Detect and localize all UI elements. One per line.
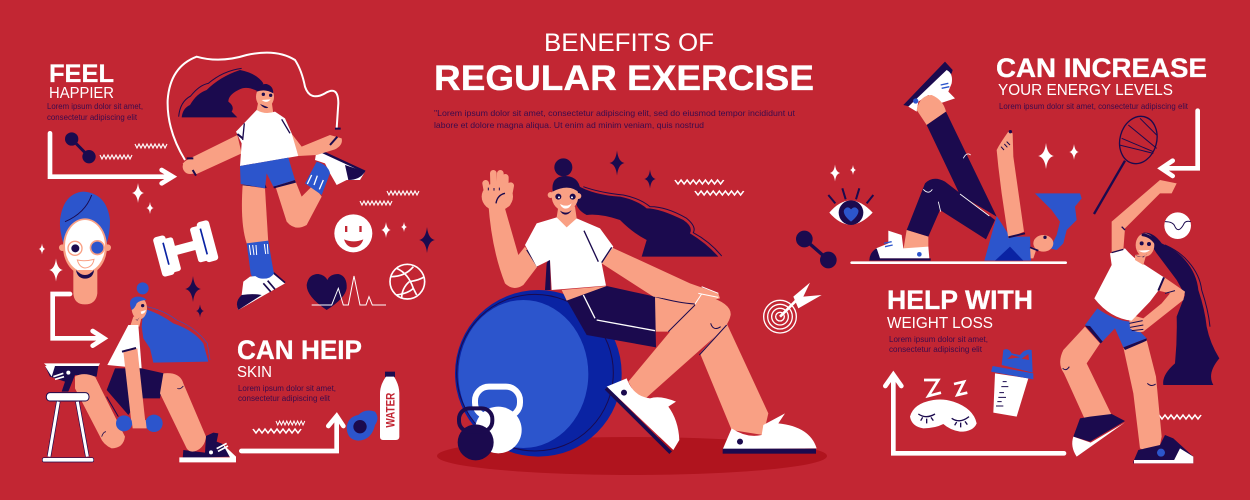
central woman on fitness ball	[455, 158, 837, 460]
right arm	[602, 247, 720, 303]
heading: can help skin: SKIN	[237, 364, 272, 381]
heading: feel happier: FEEL	[49, 60, 114, 88]
heading: can help skin	[237, 335, 362, 403]
sparkles	[39, 143, 1079, 318]
intro text: "Lorem ipsum dolor sit amet, consectetur adipiscing elit, sed do eiusmod tempor incididunt ut	[434, 108, 796, 118]
heading: can help skin: CAN HEIP	[237, 335, 362, 365]
heading: can increase energy	[996, 53, 1207, 111]
face mask woman	[59, 192, 111, 283]
icon: small navy dumbbell	[65, 132, 96, 163]
waist	[562, 286, 607, 301]
arrow: to jump rope girl	[50, 133, 173, 183]
zigzags	[100, 144, 1201, 433]
leg detail lines	[655, 297, 727, 355]
heading: feel happier: HAPPIER	[49, 85, 114, 102]
right top group	[828, 62, 1198, 263]
left bottom group	[42, 257, 425, 462]
heading: can increase energy: Lorem ipsum dolor sit amet, consectetur adipiscing elit	[999, 101, 1189, 111]
arrow: to water	[241, 416, 343, 451]
icon: sleep mask	[910, 380, 977, 432]
icon: smiley	[334, 214, 372, 252]
heading: help with weight loss: WEIGHT LOSS	[887, 315, 993, 332]
intro text	[434, 108, 796, 130]
heading: help with weight loss: Lorem ipsum dolor sit amet,	[889, 334, 988, 344]
icon: racket	[1094, 112, 1162, 214]
stretching woman	[1060, 180, 1219, 463]
jump rope girl	[179, 68, 365, 281]
icon: navy dumbbell	[796, 231, 837, 268]
heading: help with weight loss: consectetur adipiscing elit	[889, 344, 983, 354]
front leg and thigh	[628, 296, 731, 403]
heading: can increase energy: YOUR ENERGY LEVELS	[998, 82, 1173, 99]
icon: tennis ball	[1164, 212, 1191, 239]
head	[548, 158, 581, 227]
ponytail	[575, 185, 722, 257]
heading: can help skin: consectetur adipiscing elit	[238, 393, 331, 403]
back leg	[700, 323, 768, 435]
icon: heart with ECG	[307, 274, 386, 310]
heading: can increase energy: CAN INCREASE	[996, 53, 1207, 83]
icon: eye	[828, 188, 873, 225]
left top: arrow, dumbbell, jump-rope figure and icons	[50, 53, 372, 283]
lying woman	[869, 62, 1082, 261]
arrow: to sleep mask	[885, 375, 1064, 453]
jump girl front shoe	[237, 257, 285, 310]
title: BENEFITS OF	[544, 29, 714, 57]
dumbbell woman	[44, 282, 236, 462]
kettlebells	[458, 387, 522, 460]
heading: can help skin: Lorem ipsum dolor sit amet,	[238, 383, 336, 393]
icon: water bottle: WATER	[384, 392, 398, 428]
heading: help with weight loss: HELP WITH	[887, 285, 1033, 315]
title	[434, 29, 814, 98]
heading: feel happier	[47, 60, 143, 122]
icon: target	[764, 283, 822, 333]
icon: volleyball	[390, 264, 425, 299]
shirt	[525, 217, 613, 290]
raised arm	[482, 173, 537, 288]
title: REGULAR EXERCISE	[434, 59, 814, 98]
floor shadow	[437, 437, 827, 475]
heading: feel happier: Lorem ipsum dolor sit amet,	[47, 101, 143, 111]
jump rope	[168, 53, 338, 160]
back shoe	[723, 413, 817, 454]
icon: water bottle	[380, 372, 399, 440]
arrow: to dumbbell woman	[53, 294, 104, 346]
right bottom group	[885, 180, 1219, 463]
icon: white dumbbell	[152, 220, 220, 277]
icon: avocado	[347, 411, 377, 441]
front shoe	[606, 378, 679, 453]
floor line	[852, 259, 1066, 267]
neck of face mask woman	[73, 270, 97, 304]
arrow: to stretching woman	[1161, 111, 1198, 176]
icon: shaker bottle	[991, 349, 1033, 417]
fitness ball	[455, 290, 622, 457]
stool	[42, 393, 94, 462]
heading: help with weight loss	[887, 285, 1033, 354]
intro text: labore et dolore magna aliqua. Ut enim ad minim veniam, quis nostrud	[434, 120, 704, 130]
shorts	[567, 286, 656, 347]
heading: feel happier: consectetur adipiscing elit	[47, 112, 138, 122]
